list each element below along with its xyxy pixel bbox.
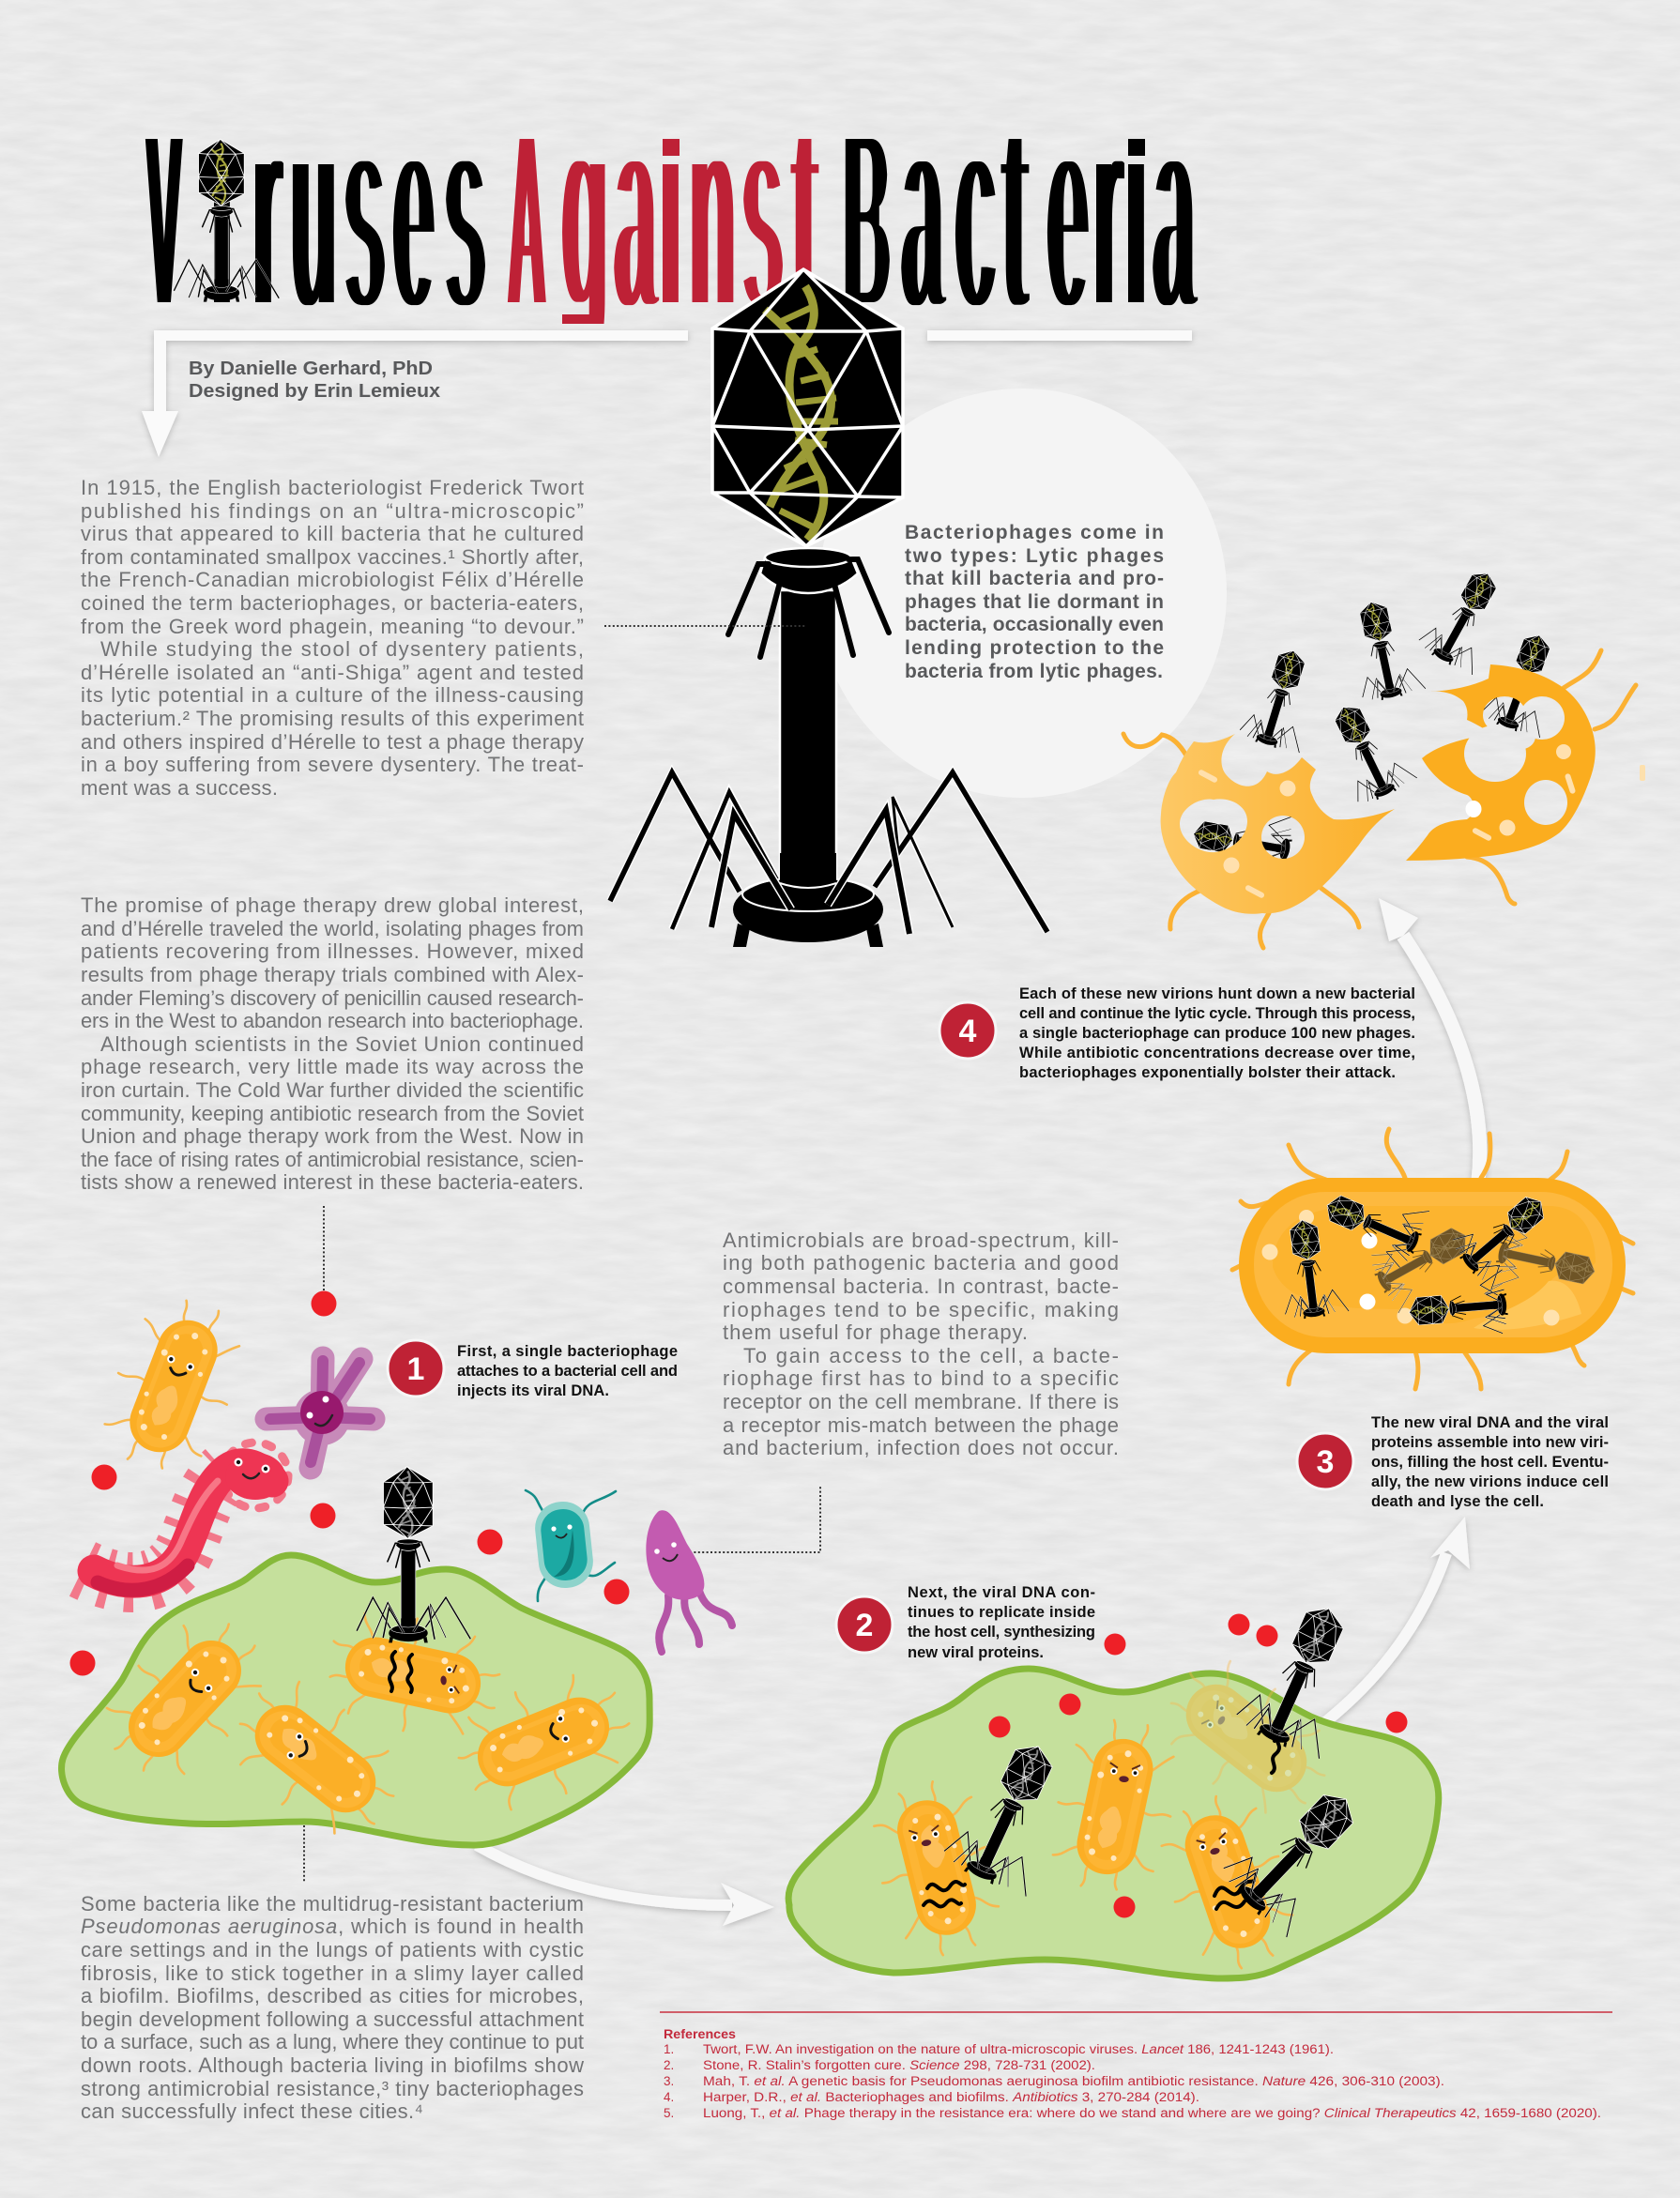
- dotted leader to biofilm text: [303, 1825, 305, 1882]
- brown phages: [1366, 1211, 1600, 1314]
- pink microbe with tentacles: [646, 1510, 732, 1652]
- text block: history of phage discovery: While studying the stool of dysentery patients,: [100, 637, 584, 661]
- arrow: step 1 to step 2: [477, 1845, 774, 1926]
- text block: promise of phage therapy: Although scientists in the Soviet Union continued: [100, 1032, 584, 1056]
- left lysed cell: [1160, 734, 1395, 914]
- text block: specificity of phages: To gain access to the cell, a bacte-: [743, 1344, 1119, 1367]
- step 2 text: the host cell, synthesizing: [908, 1624, 1095, 1641]
- star shaped amoeba: [267, 1358, 374, 1468]
- callout: phage types: [905, 522, 1164, 682]
- step 4 text: [1019, 985, 1415, 1081]
- badge: step 3: [1297, 1433, 1353, 1489]
- bacterium with phage lower right: [1147, 1771, 1384, 1982]
- panel: step 3 bacterium full of phages: [1232, 1129, 1633, 1389]
- black phages: [1275, 1173, 1564, 1340]
- bacterium lower left: [86, 1597, 285, 1799]
- text block: specificity of phages: receptor on the cell membrane. If there is: [723, 1390, 1119, 1413]
- title word: Viruses: iruses: [212, 42, 485, 374]
- badge: step 1: 1: [407, 1351, 424, 1387]
- badge: step 2: 2: [856, 1608, 873, 1643]
- step 4 text: While antibiotic concentrations decrease over time,: [1019, 1045, 1415, 1061]
- text block: biofilms: Some bacteria like the multidrug-resistant bacterium: [81, 1892, 584, 1916]
- text block: promise of phage therapy: community, keeping antibiotic research from the Soviet: [81, 1102, 584, 1125]
- white backdrop circle: [817, 389, 1227, 798]
- step 3 text: ally, the new virions induce cell: [1371, 1473, 1609, 1490]
- text block: history of phage discovery: In 1915, the English bacteriologist Frederick Twort: [81, 476, 584, 499]
- badge: step 1: [388, 1340, 444, 1397]
- text block: promise of phage therapy: results from phage therapy trials combined with Alex-: [81, 963, 584, 986]
- step 2 text: [908, 1584, 1095, 1661]
- bacterium right: [444, 1657, 645, 1825]
- byline: [189, 359, 440, 402]
- green biofilm blob: [788, 1669, 1439, 1978]
- arrow: step 2 to step 3: [1325, 1517, 1470, 1722]
- text block: biofilms: a biofilm. Biofilms, described as cities for microbes,: [81, 1984, 584, 2007]
- text block: history of phage discovery: in a boy suffering from severe dysentery. The treat-: [81, 753, 584, 776]
- text block: promise of phage therapy: The promise of phage therapy drew global interest,: [81, 893, 584, 917]
- references: Twort, F.W. An investigation on the nature of ultra-microscopic viruses. Lancet 186, 1241-1243 (1961).: [703, 2042, 1334, 2056]
- title word: Against: [507, 139, 818, 324]
- left cell details: [1198, 769, 1295, 899]
- text block: biofilms: down roots. Although bacteria living in biofilms show: [81, 2053, 584, 2077]
- references: 3.: [664, 2074, 674, 2088]
- main bacteriophage illustration: [610, 269, 1047, 947]
- panel: step 4 lysed bacteria and released phages: [1117, 560, 1645, 948]
- text block: promise of phage therapy: [81, 893, 584, 1194]
- text block: specificity of phages: Antimicrobials are broad-spectrum, kill-: [723, 1229, 1119, 1252]
- text block: promise of phage therapy: tists show a renewed interest in these bacteria-eaters.: [81, 1170, 584, 1194]
- text block: promise of phage therapy: the face of rising rates of antimicrobial resistance, scien-: [81, 1148, 584, 1171]
- dotted leader from pink microbe: [690, 1487, 820, 1552]
- text block: biofilms: strong antimicrobial resistance,³ tiny bacteriophages: [81, 2077, 584, 2100]
- text block: history of phage discovery: its lytic potential in a culture of the illness-causing: [81, 683, 584, 707]
- faded dying bacterium with phage: [1145, 1592, 1377, 1836]
- text block: specificity of phages: them useful for phage therapy.: [723, 1320, 1028, 1344]
- references: Harper, D.R., et al. Bacteriophages and biofilms. Antibiotics 3, 270-284 (2014).: [703, 2090, 1199, 2104]
- panel: step 2 biofilm: [788, 1592, 1439, 1982]
- text block: promise of phage therapy: phage research, very little made its way across the: [81, 1055, 584, 1078]
- icon: phage as the letter i: [174, 139, 279, 302]
- step 1 text: First, a single bacteriophage: [457, 1343, 678, 1360]
- text block: history of phage discovery: d’Hérelle isolated an “anti-Shiga” agent and tested: [81, 661, 584, 684]
- callout: phage types: lending protection to the: [905, 637, 1164, 659]
- red centipede microbe: [83, 1442, 288, 1590]
- step 2 text: new viral proteins.: [908, 1644, 1044, 1661]
- byline arrow: [142, 330, 1192, 457]
- released phages: [1238, 560, 1519, 808]
- infected bacterium: [318, 1603, 509, 1748]
- text block: biofilms: care settings and in the lungs of patients with cystic: [81, 1938, 584, 1961]
- free bacterium with smile: [91, 1286, 257, 1486]
- teal microbe: [526, 1490, 616, 1601]
- step 4 text: Each of these new virions hunt down a new bacterial: [1019, 985, 1415, 1002]
- phage attached to bacterium: [357, 1467, 470, 1642]
- title word: Viruses: V: [146, 73, 182, 369]
- step 1 text: [457, 1343, 678, 1399]
- step 3 text: [1371, 1414, 1609, 1510]
- badge: step 4: 4: [959, 1014, 977, 1049]
- references: Mah, T. et al. A genetic basis for Pseudomonas aeruginosa biofilm antibiotic resistance. Nature 426, 306-310 (2003).: [703, 2074, 1444, 2088]
- text block: promise of phage therapy: ander Fleming’s discovery of penicillin caused research-: [81, 986, 584, 1010]
- byline: Designed by Erin Lemieux: [189, 381, 440, 402]
- right lysed cell: [1406, 664, 1596, 861]
- title word: Viruses: [145, 139, 485, 306]
- step 2 text: Next, the viral DNA con-: [908, 1584, 1095, 1601]
- bacterium with phage left: [862, 1729, 1086, 1965]
- text block: biofilms: to a surface, such as a lung, where they continue to put: [81, 2030, 584, 2053]
- step 1 text: attaches to a bacterial cell and: [457, 1363, 678, 1380]
- title word: Bacteria: B: [844, 73, 890, 369]
- text block: specificity of phages: [723, 1229, 1119, 1459]
- text block: promise of phage therapy: ers in the West to abandon research into bacteriophage.: [81, 1009, 584, 1032]
- text block: specificity of phages: riophage first has to bind to a specific: [723, 1366, 1119, 1390]
- text block: biofilms: Pseudomonas aeruginosa, which is found in health: [81, 1915, 584, 1938]
- step 1 text: injects its viral DNA.: [457, 1382, 609, 1399]
- text block: promise of phage therapy: patients recovering from illnesses. However, mixed: [81, 939, 584, 963]
- text block: biofilms: [81, 1892, 584, 2123]
- text block: history of phage discovery: published his findings on an “ultra-microscopic”: [81, 499, 584, 523]
- step 3 text: ons, filling the host cell. Eventu-: [1371, 1454, 1609, 1471]
- step 3 text: proteins assemble into new viri-: [1371, 1434, 1609, 1451]
- step 3 text: death and lyse the cell.: [1371, 1493, 1544, 1510]
- badge: step 3: 3: [1317, 1444, 1334, 1480]
- flagella of lysed cells: [1123, 650, 1636, 948]
- step 3 text: The new viral DNA and the viral: [1371, 1414, 1609, 1431]
- dotted leader to red dot: [323, 1206, 325, 1291]
- step 4 text: a single bacteriophage can produce 100 new phages.: [1019, 1025, 1415, 1042]
- right cell details: [1466, 744, 1645, 842]
- callout: phage types: phages that lie dormant in: [905, 591, 1164, 613]
- dotted leader to phage: [604, 625, 806, 627]
- text block: history of phage discovery: the French-Canadian microbiologist Félix d’Hérelle: [81, 568, 584, 591]
- text block: history of phage discovery: [81, 476, 584, 800]
- cell dots: [1261, 1210, 1560, 1325]
- text block: history of phage discovery: virus that appeared to kill bacteria that he cultured: [81, 522, 584, 545]
- references: 1.: [664, 2042, 674, 2056]
- references: [660, 2012, 1612, 2120]
- phages behind lysed cells: [1188, 626, 1573, 878]
- text block: promise of phage therapy: and d’Hérelle traveled the world, isolating phages from: [81, 917, 584, 940]
- references: 4.: [664, 2090, 674, 2104]
- references: 5.: [664, 2106, 674, 2120]
- text block: history of phage discovery: bacterium.² The promising results of this experiment: [81, 707, 584, 730]
- text block: specificity of phages: and bacterium, infection does not occur.: [723, 1436, 1119, 1459]
- title word: Bacteria: [845, 139, 1198, 306]
- text block: promise of phage therapy: iron curtain. The Cold War further divided the scientific: [81, 1078, 584, 1102]
- step 4 text: bacteriophages exponentially bolster their attack.: [1019, 1064, 1396, 1081]
- text block: specificity of phages: a receptor mis-match between the phage: [723, 1413, 1119, 1437]
- panel: step 1 biofilm: [62, 1467, 649, 1856]
- cell body: [1239, 1178, 1626, 1353]
- title word: Against: gainst: [562, 42, 817, 374]
- arrow: step 3 to step 4: [1379, 898, 1480, 1181]
- text block: biofilms: begin development following a successful attachment: [81, 2007, 584, 2031]
- title word: Bacteria: acteria: [902, 42, 1195, 374]
- text block: history of phage discovery: from contaminated smallpox vaccines.¹ Shortly after,: [81, 545, 584, 569]
- byline: By Danielle Gerhard, PhD: [189, 359, 433, 379]
- callout: phage types: Bacteriophages come in: [905, 522, 1164, 543]
- text block: specificity of phages: commensal bacteria. In contrast, bacte-: [723, 1275, 1119, 1298]
- callout: phage types: bacteria from lytic phages.: [905, 661, 1163, 682]
- step 4 text: cell and continue the lytic cycle. Through this process,: [1019, 1005, 1415, 1022]
- text block: biofilms: can successfully infect these cities.⁴: [81, 2099, 423, 2123]
- text block: history of phage discovery: coined the term bacteriophages, or bacteria-eaters,: [81, 591, 584, 615]
- title word: Against: A: [508, 73, 546, 369]
- green biofilm blob: [62, 1555, 649, 1845]
- flagella: [1232, 1129, 1633, 1389]
- badge: step 2: [836, 1596, 893, 1653]
- text block: history of phage discovery: and others inspired d’Hérelle to test a phage therapy: [81, 730, 584, 754]
- text block: history of phage discovery: ment was a success.: [81, 776, 278, 800]
- callout: phage types: two types: Lytic phages: [905, 545, 1164, 567]
- badge: step 4: [939, 1002, 996, 1059]
- text block: biofilms: fibrosis, like to stick together in a slimy layer called: [81, 1961, 584, 1985]
- title: Viruses Against Bacteria: [145, 139, 1198, 324]
- callout: phage types: that kill bacteria and pro-: [905, 568, 1164, 589]
- text block: history of phage discovery: from the Greek word phagein, meaning “to devour.”: [81, 615, 584, 638]
- references: References: [664, 2027, 736, 2041]
- text block: specificity of phages: ing both pathogenic bacteria and good: [723, 1251, 1119, 1275]
- step 2 text: tinues to replicate inside: [908, 1604, 1095, 1621]
- bacterium lower centre: [214, 1662, 418, 1856]
- references: Stone, R. Stalin’s forgotten cure. Science 298, 728-731 (2002).: [703, 2058, 1095, 2072]
- text block: promise of phage therapy: Union and phage therapy work from the West. Now in: [81, 1124, 584, 1148]
- red antibiotic dots around step 1: [69, 1291, 629, 1676]
- red antibiotic dots around step 2: [989, 1614, 1408, 1918]
- references: 2.: [664, 2058, 674, 2072]
- references: Luong, T., et al. Phage therapy in the resistance era: where do we stand and where are we going? Clinical Therapeutics 42, 1659-1680 (2020).: [703, 2106, 1601, 2120]
- bacterium centre: [1043, 1711, 1188, 1901]
- callout: phage types: bacteria, occasionally even: [905, 614, 1164, 635]
- text block: specificity of phages: riophages tend to be specific, making: [723, 1298, 1119, 1321]
